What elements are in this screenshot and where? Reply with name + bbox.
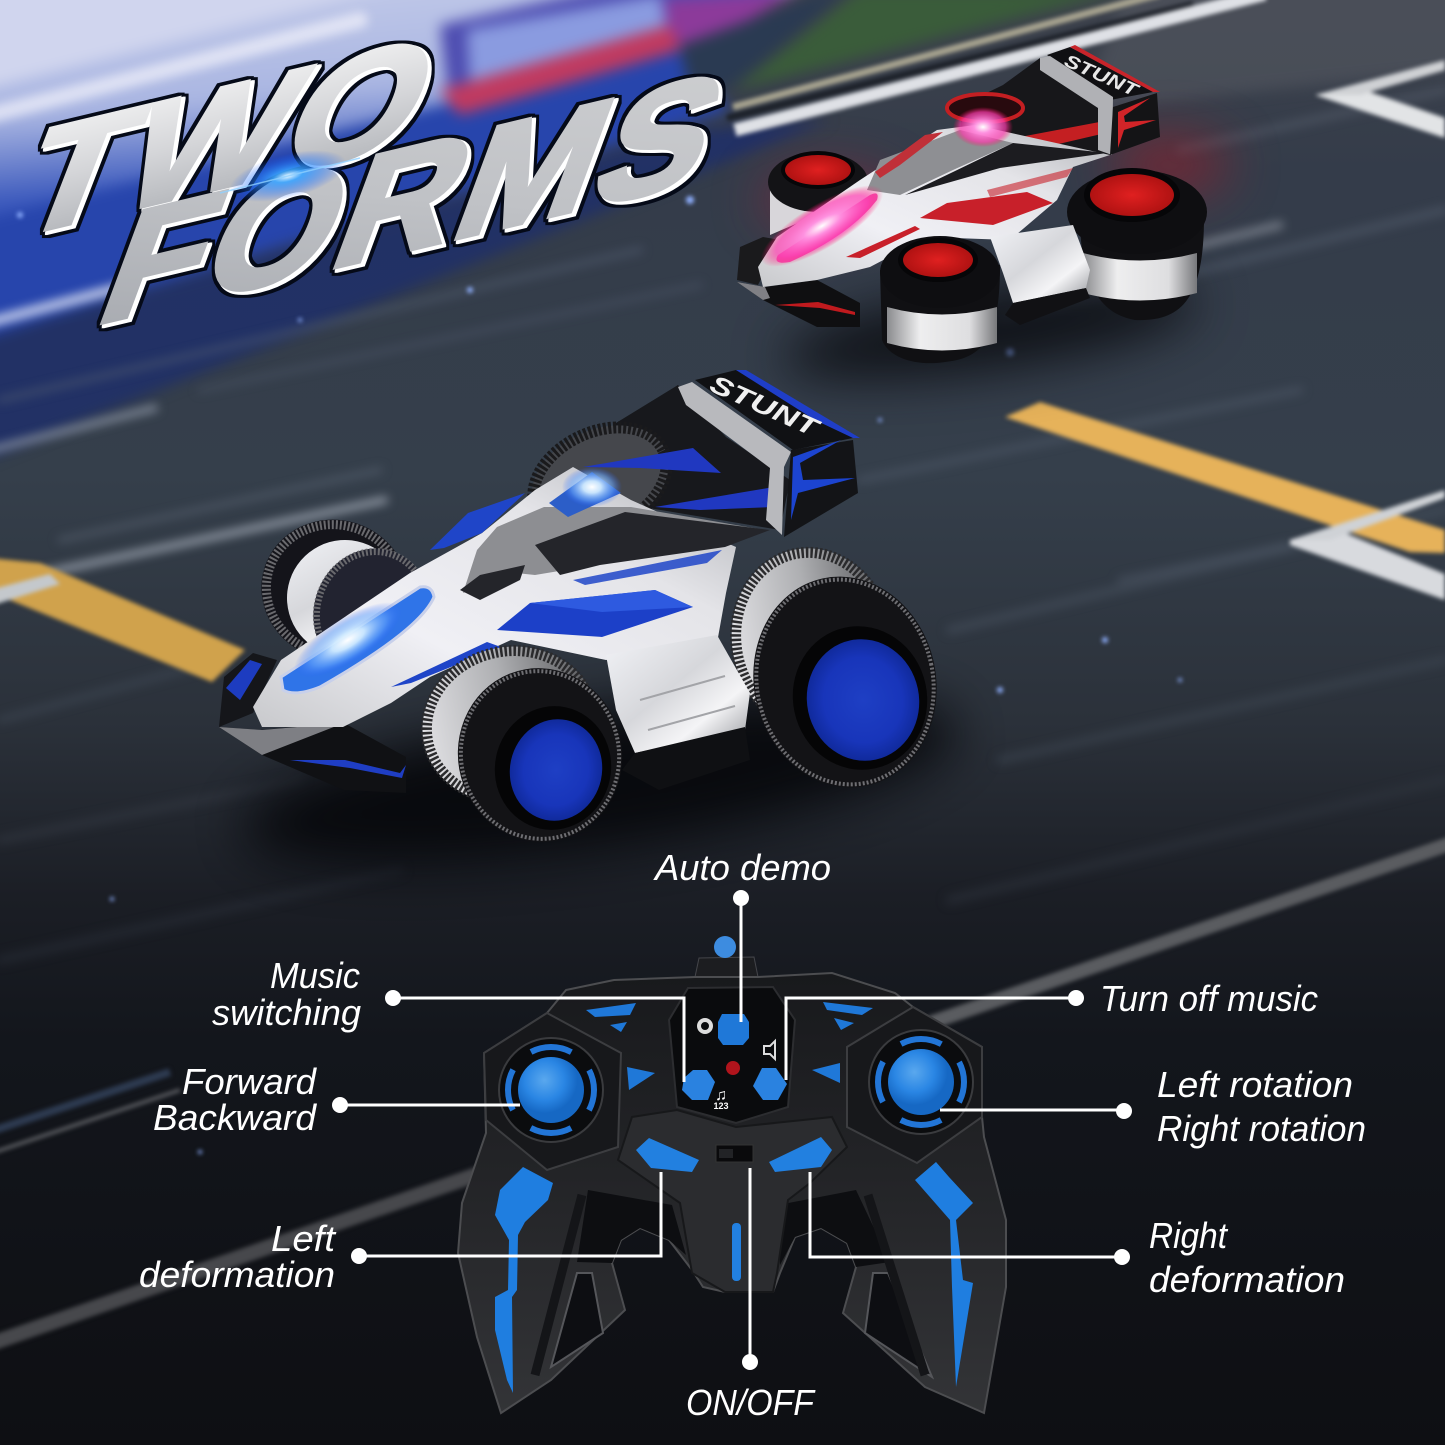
remote controller: [458, 936, 1006, 1413]
controller: grip grooves: [535, 1195, 925, 1375]
controller: blue grip right: [915, 1162, 973, 1387]
red car: front wheel: [880, 236, 1000, 363]
blue car: rear wing: [678, 370, 860, 537]
icon: music 123: [713, 1087, 729, 1111]
controller: power switch: [716, 1145, 753, 1162]
controller: left bumper: [636, 1138, 699, 1172]
controller: right bumper: [769, 1137, 832, 1172]
label: music switching: Music: [270, 955, 360, 996]
icon: speaker: [764, 1041, 775, 1059]
blue car: front wheel: [408, 630, 636, 855]
label: left rotation right rotation: Left rotation: [1157, 1064, 1353, 1105]
red car: body: [758, 125, 1110, 287]
label: left deformation: [139, 1218, 337, 1295]
red car: pink headlight: [751, 107, 1013, 281]
road markings: [1005, 402, 1445, 553]
label: forward backward: [153, 1061, 317, 1138]
blue car: dark intake panels: [460, 512, 770, 600]
label: forward backward: Backward: [153, 1097, 317, 1138]
blue car: side stripes: [391, 493, 722, 687]
red car: rear arch and fins: [947, 58, 1110, 155]
blue car: right wheel: [717, 536, 956, 805]
label: music switching: switching: [212, 992, 361, 1033]
blue car: left wheel: [243, 501, 447, 691]
blue car: body: [253, 467, 736, 727]
label: left deformation: Left: [271, 1218, 337, 1259]
title: two forms: [0, 0, 752, 359]
label: forward backward: Forward: [182, 1061, 317, 1102]
controller: centre panel: [669, 987, 795, 1123]
label: left rotation right rotation: Right rotation: [1157, 1108, 1366, 1149]
blue car: chin spoiler: [219, 653, 406, 793]
red car: right wheel: [1067, 168, 1207, 320]
controller: left button: [682, 1070, 715, 1100]
icon: gear: [699, 1020, 711, 1032]
controller: centre light bar: [732, 1223, 741, 1281]
icon: music 123: 123: [713, 1101, 729, 1111]
blue car: [219, 370, 966, 899]
controller: lower mid section: [618, 1110, 847, 1292]
blue car: cockpit light: [549, 467, 622, 517]
red car: stunt text: STUNT: [1061, 50, 1143, 101]
controller: grips and body: [458, 973, 1006, 1413]
blue car: rear fins: [583, 448, 774, 510]
blue car: hood decal: [497, 590, 693, 637]
red car: grey spine: [867, 130, 1013, 195]
blue car: stunt text: STUNT: [706, 370, 825, 444]
controller: shoulder decals: [586, 1002, 873, 1090]
controller: antenna knob: [695, 936, 758, 977]
controller: top button: [718, 1014, 749, 1045]
blue car: far rear wheel: [514, 404, 686, 556]
label: left deformation: deformation: [139, 1254, 335, 1295]
blue car: side pod: [606, 635, 750, 790]
label: left rotation right rotation: [1157, 1064, 1366, 1149]
red car: [737, 45, 1230, 399]
blue car: headlight capsule: [281, 587, 434, 693]
red car: chin spoiler: [737, 237, 860, 327]
label: right deformation: deformation: [1149, 1259, 1345, 1300]
title line: FORMS: FORMS: [79, 34, 752, 359]
blue car shadow: [234, 661, 966, 899]
controller: right joystick: [847, 1007, 982, 1163]
controller: grip windows: [551, 1273, 932, 1377]
sparkles: [17, 196, 1182, 1154]
leader dots: [332, 890, 1132, 1370]
label: on/off: ON/OFF: [686, 1382, 816, 1423]
title line: TWO: TWO: [0, 0, 464, 273]
label: right deformation: [1149, 1215, 1345, 1300]
title lens flare: [220, 140, 360, 212]
label: turn off music: Turn off music: [1100, 978, 1318, 1019]
red car shadow and glow: [760, 135, 1230, 399]
leader lines: [340, 898, 1124, 1362]
label: auto demo: Auto demo: [653, 847, 831, 888]
controller: blue grip left: [495, 1167, 553, 1393]
controller: right button: [753, 1068, 787, 1100]
controller: dark grip recesses: [577, 1190, 890, 1267]
label: right deformation: Right: [1149, 1215, 1229, 1256]
red car: hood decals: [846, 168, 1073, 258]
controller: left joystick: [484, 1013, 621, 1170]
red car: side pod: [990, 225, 1090, 325]
label: music switching: [212, 955, 361, 1033]
red car: rear wing: [1040, 45, 1160, 155]
blue car: grey cockpit deck: [463, 507, 765, 593]
icon: music 123: ♫: [715, 1087, 727, 1104]
blue car: rear arch: [600, 385, 790, 530]
red car: dark cockpit: [905, 143, 1107, 195]
red car: rear-left wheel: [768, 151, 868, 235]
controller: red led: [726, 1061, 740, 1075]
